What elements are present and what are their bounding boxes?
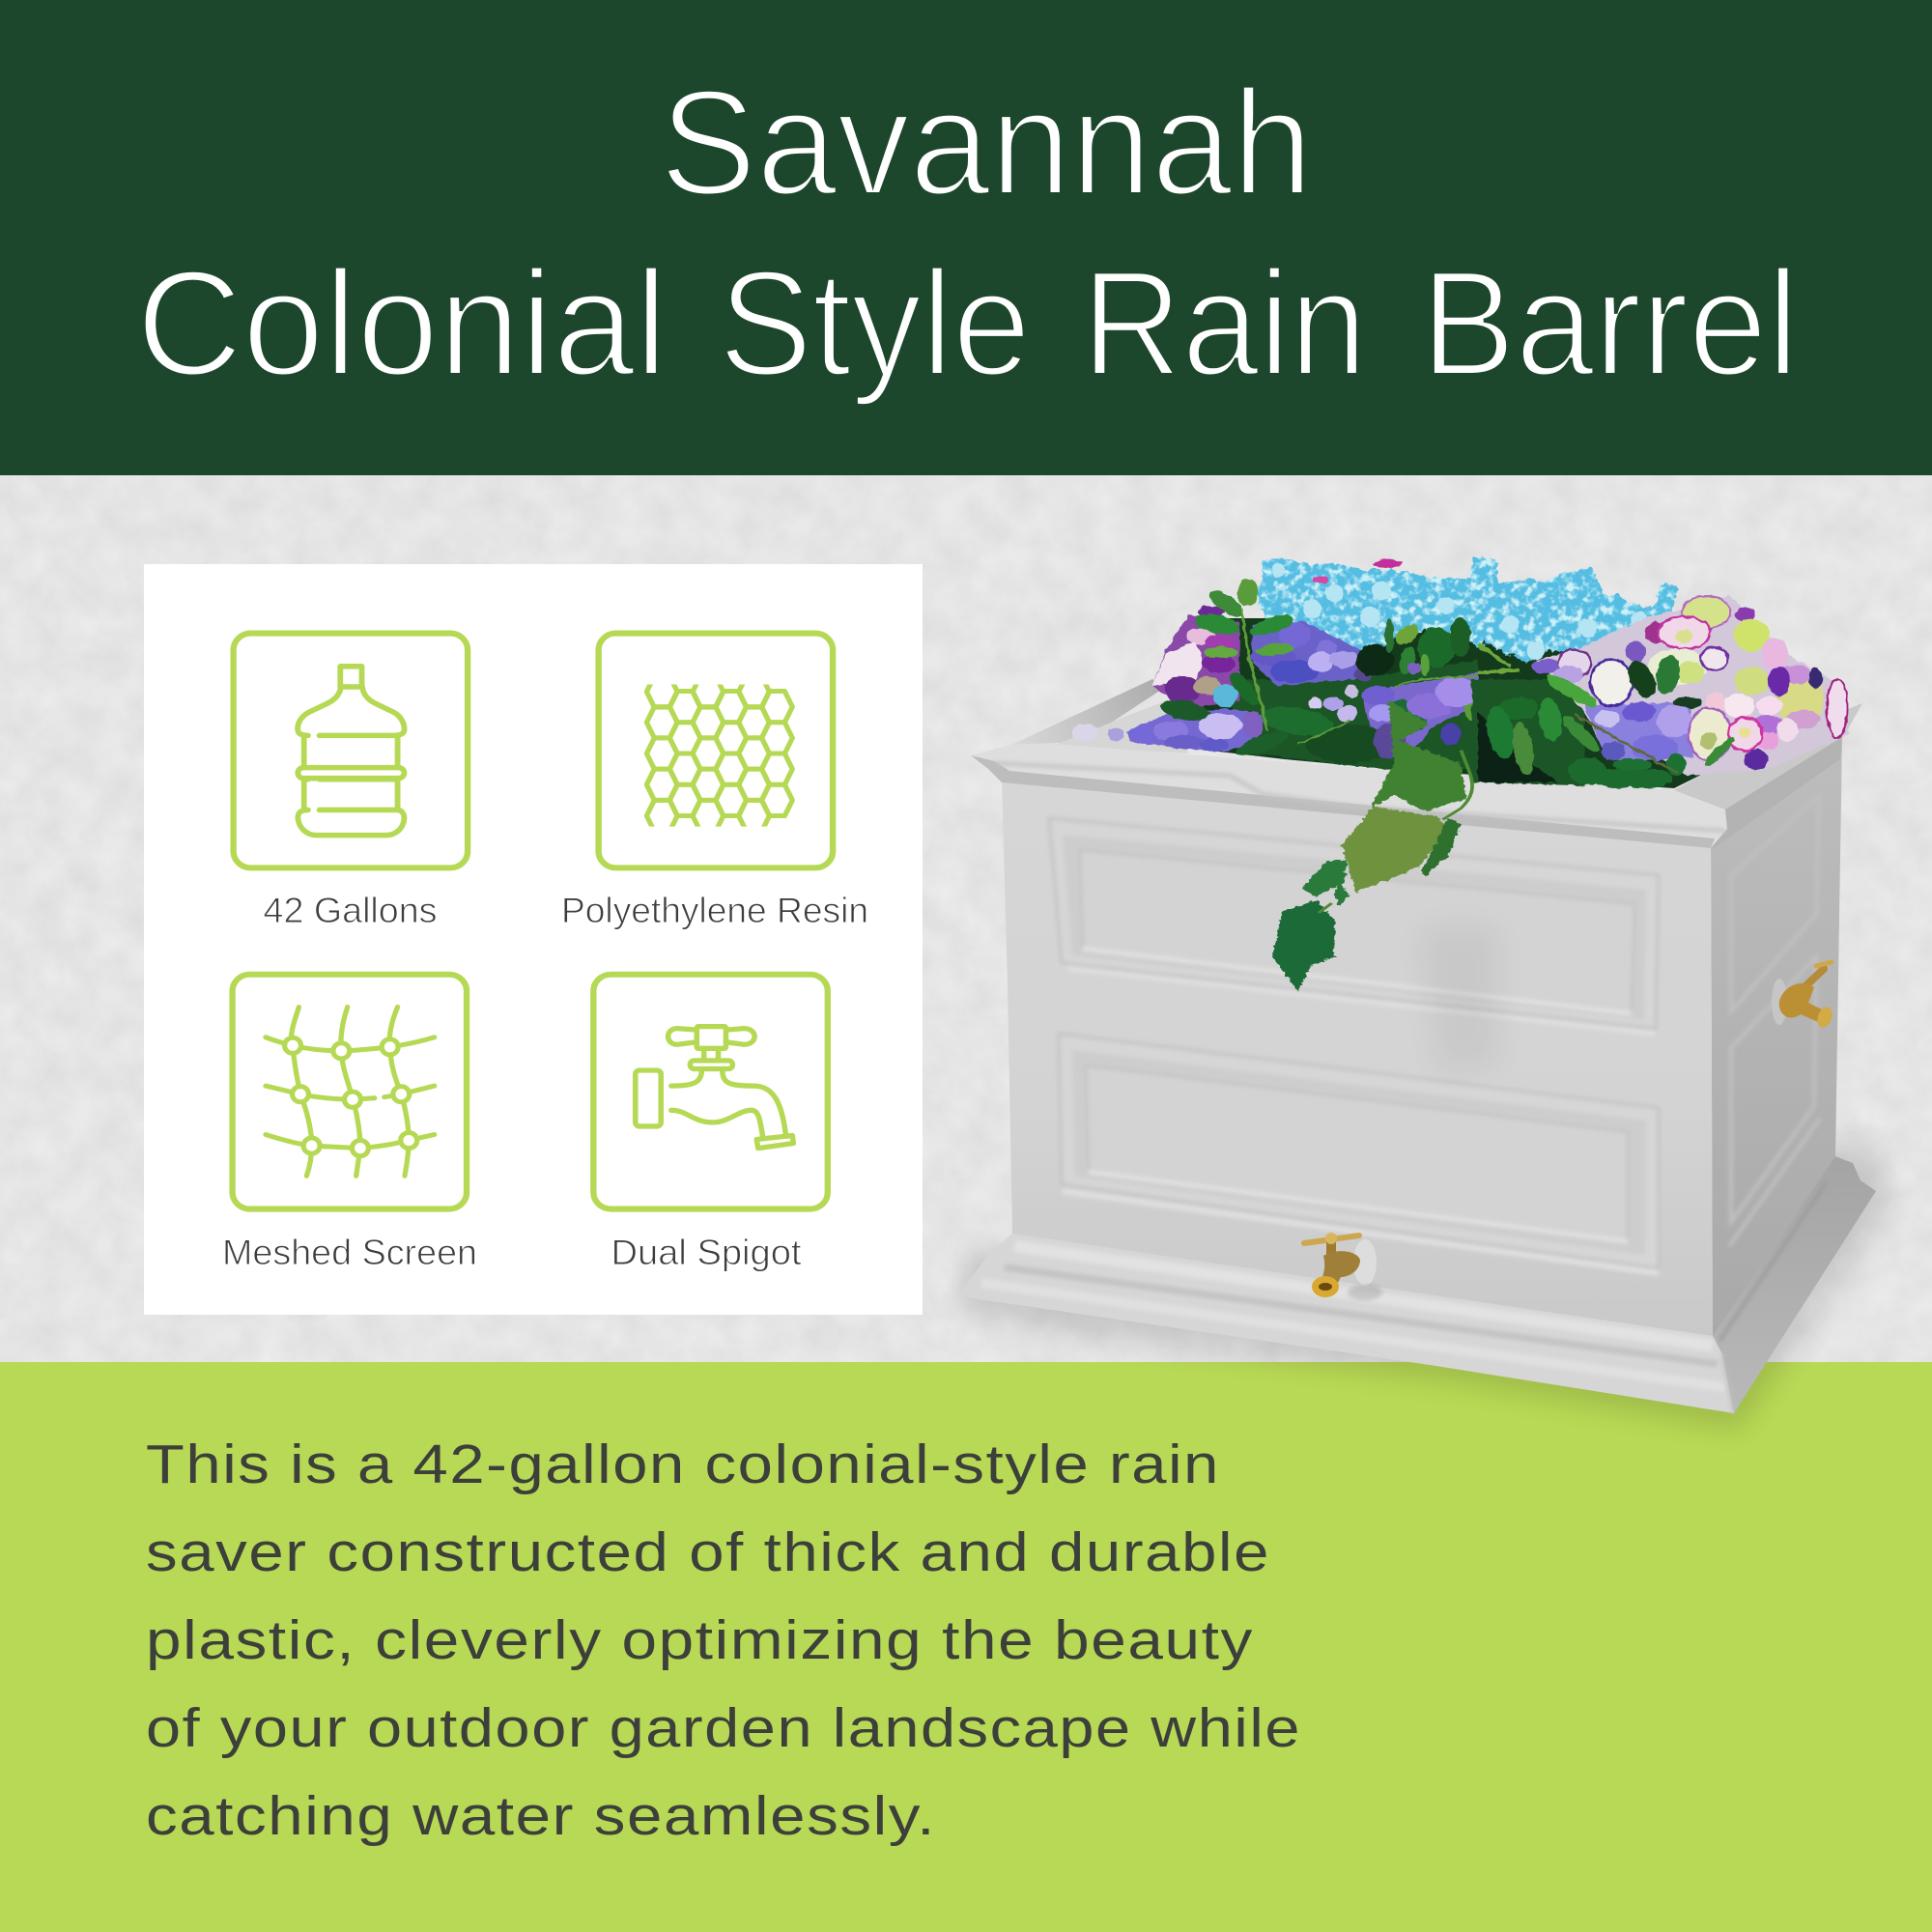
leaves right half [1498,697,1538,720]
upper front panel [1049,818,1659,1034]
body description text: This is a 42-gallon colonial-style rain [146,1434,1220,1495]
right face mouldings [1719,796,1826,1341]
body description text: plastic, cleverly optimizing the beauty [146,1609,1254,1671]
body description text [146,1434,1301,1847]
trailing vine [1272,700,1472,992]
body description text: catching water seamlessly. [146,1785,936,1847]
rim right top surface [1674,703,1862,811]
rim details and overflow notch [995,763,1725,831]
far-right flowers [1776,669,1823,727]
dark foliage mass [1164,618,1753,788]
bottom-left purple [1071,724,1098,741]
body description text: saver constructed of thick and durable [146,1521,1270,1583]
footer band [0,1362,1932,1932]
flowers: blue blossoms [1256,557,1678,664]
feature card [144,564,923,1315]
barrel front face [1002,781,1713,1336]
feature labels [222,891,868,1272]
barrel base front [960,1234,1734,1413]
vine shadow on barrel [1420,927,1497,1072]
front spigot [1304,1233,1382,1300]
rim inner plate [1053,701,1188,753]
feature labels: Meshed Screen [222,1233,477,1272]
rim underside shadow [971,755,1715,848]
color base layers [1471,679,1584,785]
background: concrete texture [0,473,1932,1367]
icon: faucet, dual spigot [593,975,828,1209]
rim front band [971,744,1727,848]
title: Style [719,240,1031,407]
left flowers [1196,606,1225,617]
side spigot [1772,962,1834,1030]
vine stem [1319,751,1472,913]
center purple [1279,622,1310,648]
icon: water bottle, 42 gallons [234,634,468,867]
icon tiles [233,634,833,1209]
pastel flowers [1682,596,1731,628]
title: Savannah [660,59,1313,226]
title: Barrel [1421,240,1799,407]
greens [1355,644,1394,676]
rim right band [1711,737,1842,850]
feature labels: Dual Spigot [611,1233,802,1272]
feature labels: 42 Gallons [263,891,437,930]
title [136,59,1799,407]
barrel cast shadow [956,1140,1893,1430]
barrel right face [1711,737,1842,1336]
header band [0,0,1932,475]
barrel right base [1713,1156,1876,1413]
upper leaves [1237,579,1258,606]
lower front panel [1059,1034,1659,1273]
icon: honeycomb, polyethylene resin [599,634,833,867]
icon: net, meshed screen [233,975,467,1209]
body description text: of your outdoor garden landscape while [146,1697,1301,1759]
color base layers [1227,660,1478,770]
title: Colonial [136,240,668,407]
rain barrel product [956,557,1893,1430]
base mouldings [981,1246,1734,1413]
rim back-left wall [1011,679,1164,745]
title: Rain [1082,240,1367,407]
small purple [1309,696,1321,709]
flowers: right half of arrangement [1471,596,1848,788]
lower purple [1622,702,1656,722]
flowers: left half of arrangement [1071,559,1479,770]
feature labels: Polyethylene Resin [561,891,868,930]
